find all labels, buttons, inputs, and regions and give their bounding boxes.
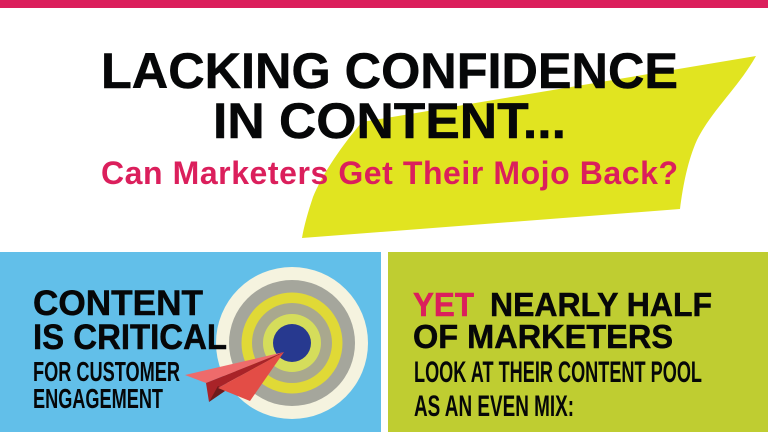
title bbox=[101, 43, 678, 149]
subtitle: Can Marketers Get Their Mojo Back? bbox=[101, 155, 678, 191]
text: for customer engagement bbox=[33, 356, 180, 414]
text: look at their content pool bbox=[414, 356, 702, 423]
top accent bar bbox=[0, 0, 768, 8]
text: look at their content pool: AS AN EVEN MIX: bbox=[414, 390, 574, 423]
icon: target bbox=[216, 267, 368, 419]
heading: yet nearly half of marketers bbox=[413, 286, 712, 355]
title: LACKING CONFIDENCE bbox=[101, 43, 678, 99]
panel background: blue bbox=[0, 252, 381, 432]
heading: yet nearly half of marketers: NEARLY HALF bbox=[490, 286, 712, 323]
heading: content is critical: IS CRITICAL bbox=[33, 318, 227, 357]
icon: paper plane bbox=[185, 352, 284, 402]
text: for customer engagement: FOR CUSTOMER bbox=[33, 356, 180, 387]
text: for customer engagement: ENGAGEMENT bbox=[33, 383, 163, 414]
title: IN CONTENT... bbox=[213, 93, 566, 149]
heading: content is critical bbox=[33, 284, 227, 357]
heading: yet nearly half of marketers: OF MARKETERS bbox=[413, 318, 673, 355]
panel background: green bbox=[388, 252, 768, 432]
yellow brush shape bbox=[302, 56, 756, 238]
heading: content is critical: CONTENT bbox=[33, 284, 203, 323]
heading: yet nearly half of marketers: YET bbox=[413, 286, 474, 323]
panel: nearly half of marketers bbox=[388, 252, 768, 432]
panel: content is critical bbox=[0, 252, 381, 432]
